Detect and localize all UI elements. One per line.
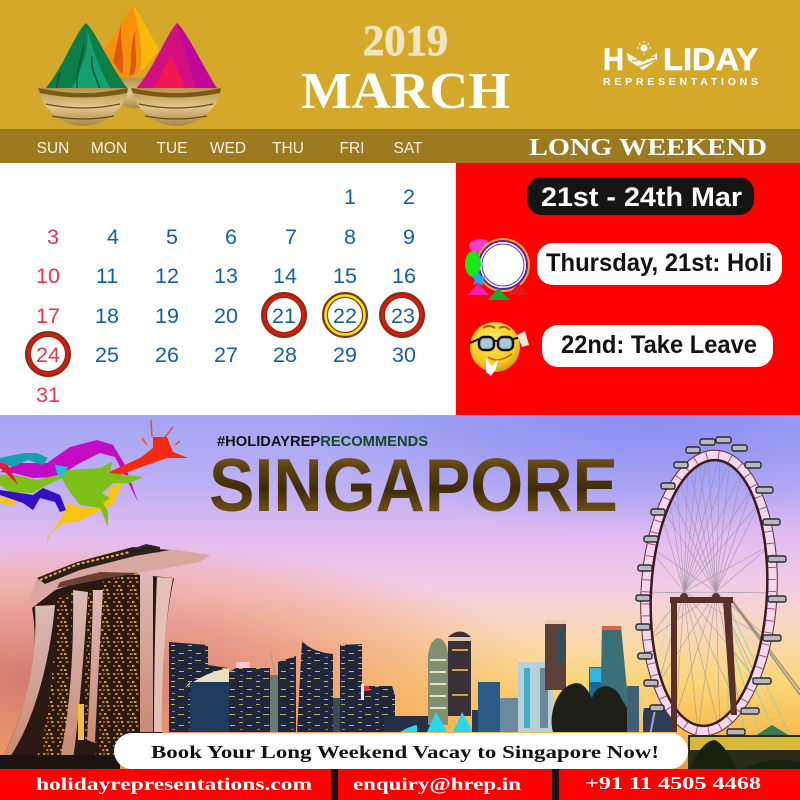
email: enquiry@hrep.in xyxy=(353,774,521,794)
calendar dates: 2 xyxy=(403,185,415,209)
calendar dates: 14 xyxy=(273,264,297,288)
call to action pill: Book Your Long Weekend Vacay to Singapore Now! xyxy=(151,742,659,762)
weekday band: SUN xyxy=(37,140,69,157)
calendar dates: 9 xyxy=(403,225,415,249)
capsules xyxy=(636,437,786,735)
date range pill xyxy=(527,177,754,215)
icon: bowls of holi colour powder xyxy=(38,5,221,126)
calendar dates: 21 xyxy=(272,304,296,328)
calendar dates: 15 xyxy=(333,264,357,288)
calendar dates: 24 xyxy=(36,343,60,367)
calendar dates: 6 xyxy=(225,225,237,249)
holiday ring 21 xyxy=(264,295,304,335)
hotel windows xyxy=(36,573,142,760)
call to action pill xyxy=(114,733,688,769)
hashtag: #HOLIDAYREPRECOMMENDS xyxy=(217,434,428,450)
logo xyxy=(603,41,758,88)
holi pill xyxy=(537,243,782,285)
Marina Bay Sands xyxy=(3,544,210,760)
calendar dates: 13 xyxy=(214,264,238,288)
panel: long weekend details xyxy=(456,163,800,415)
year: 2019 xyxy=(363,18,448,65)
take leave pill xyxy=(542,325,773,367)
calendar dates: 30 xyxy=(392,343,416,367)
weekday band: THU xyxy=(272,140,304,157)
calendar dates: 23 xyxy=(391,304,415,328)
paint splash xyxy=(0,420,188,543)
calendar dates: 1 xyxy=(344,185,356,209)
weekday band: MON xyxy=(91,140,127,157)
waterfront foreground xyxy=(0,725,800,770)
panel: Singapore skyline photo xyxy=(0,415,800,770)
calendar dates: 22 xyxy=(333,304,357,328)
calendar dates: 11 xyxy=(96,264,118,288)
calendar dates: 7 xyxy=(285,225,297,249)
calendar dates: 18 xyxy=(95,304,119,328)
long weekend heading: LONG WEEKEND xyxy=(529,135,767,161)
calendar dates: 4 xyxy=(107,225,119,249)
skyline: left cluster xyxy=(169,641,430,732)
calendar dates: 8 xyxy=(344,225,356,249)
icon: emoji with glasses xyxy=(470,322,529,376)
holiday ring 24 xyxy=(28,334,68,374)
weekday band: TUE xyxy=(156,140,188,157)
calendar dates: 12 xyxy=(155,264,179,288)
calendar dates xyxy=(36,185,416,407)
calendar dates: 27 xyxy=(214,343,238,367)
month title: MARCH xyxy=(301,63,510,120)
take leave pill: 22nd: Take Leave xyxy=(561,331,757,359)
calendar dates: 19 xyxy=(155,304,179,328)
website: holidayrepresentations.com xyxy=(36,774,312,794)
panel: calendar xyxy=(0,163,456,415)
calendar dates: 31 xyxy=(36,383,60,407)
date range pill: 21st - 24th Mar xyxy=(541,182,743,212)
header background xyxy=(0,0,800,130)
calendar dates: 17 xyxy=(36,304,60,328)
logo: LIDAY xyxy=(663,41,758,77)
calendar dates: 5 xyxy=(166,225,178,249)
logo: H xyxy=(603,41,624,77)
weekday band: SAT xyxy=(394,140,423,157)
ferris wheel xyxy=(634,437,786,739)
weekday band xyxy=(0,129,800,163)
tower supports xyxy=(670,593,737,732)
calendar dates: 10 xyxy=(36,264,60,288)
calendar dates: 26 xyxy=(155,343,179,367)
holi pill: Thursday, 21st: Holi xyxy=(546,249,772,277)
sky park deck xyxy=(29,547,210,604)
icon: holi ring xyxy=(465,238,530,300)
calendar dates: 25 xyxy=(95,343,119,367)
weekday band: FRI xyxy=(340,140,364,157)
logo: REPRESENTATIONS xyxy=(603,76,758,88)
ferris wheel: stay cables xyxy=(640,600,800,735)
calendar dates: 3 xyxy=(47,225,59,249)
calendar dates: 29 xyxy=(333,343,357,367)
footer contact bar xyxy=(0,769,800,800)
destination title: SINGAPORE xyxy=(209,443,618,527)
leave ring 22 xyxy=(325,295,365,335)
phone: +91 11 4505 4468 xyxy=(585,773,761,793)
weekday band: WED xyxy=(210,140,246,157)
calendar dates: 20 xyxy=(214,304,238,328)
calendar dates: 16 xyxy=(392,264,416,288)
calendar dates: 28 xyxy=(273,343,297,367)
skyline: centre cluster xyxy=(400,620,671,732)
holiday ring 23 xyxy=(382,295,422,335)
